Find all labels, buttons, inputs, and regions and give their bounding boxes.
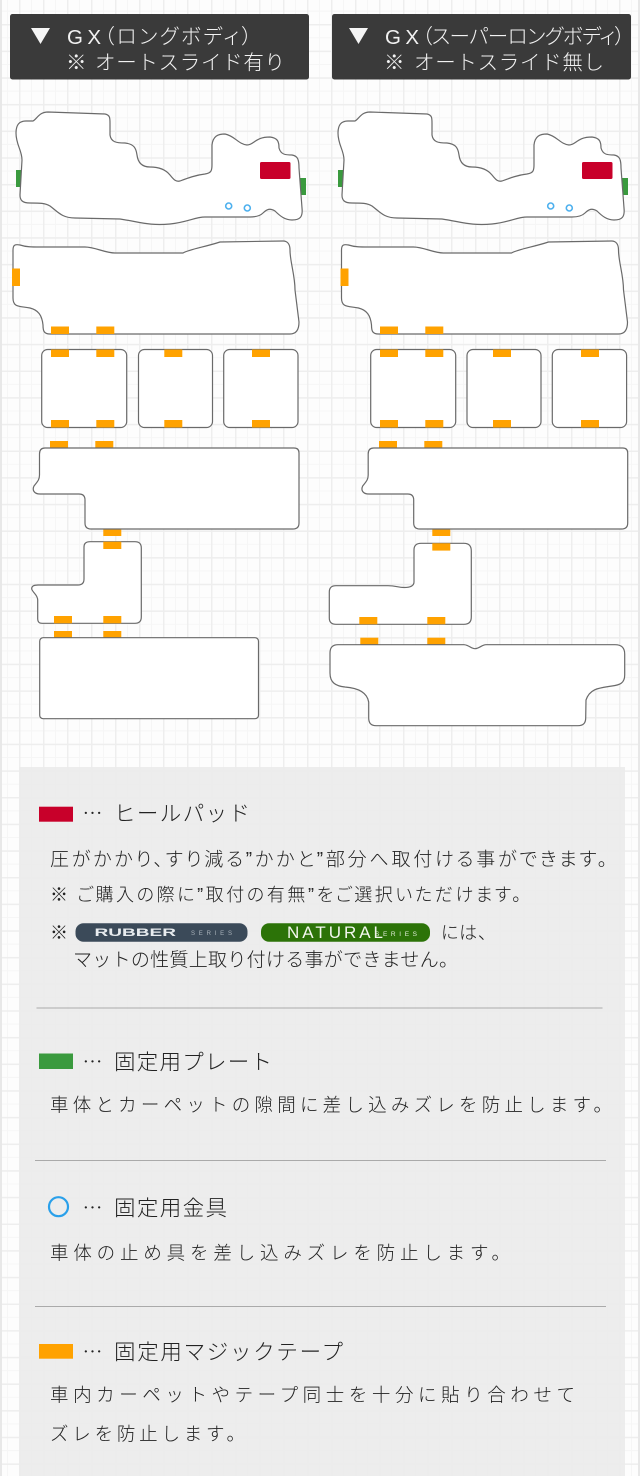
legend: heel pad: マットの性質上取り付ける事ができません。	[73, 949, 458, 971]
second row mat left	[12, 241, 299, 334]
rear mat right	[330, 638, 625, 726]
badge: rubber series: RUBBER	[94, 927, 176, 939]
header: GX long body: GX	[67, 26, 101, 49]
legend: velcro tape: ズレを防止します。	[50, 1424, 245, 1444]
legend: heel pad: …	[82, 798, 102, 826]
legend: metal fastener: 車体の止め具を差し込みズレを防止します。	[50, 1242, 510, 1264]
seat mats left	[42, 350, 298, 428]
legend: heel pad: ※	[50, 923, 68, 943]
header: GX super long body	[332, 14, 631, 80]
header: GX super long body: オートスライド無し	[414, 52, 604, 74]
panel: legend	[19, 767, 625, 1476]
badge: rubber series: SERIES	[191, 931, 232, 937]
L shaped mat left	[32, 542, 141, 623]
second row mat right	[340, 241, 628, 334]
header: GX long body	[10, 14, 309, 80]
header: GX long body: ※	[66, 52, 86, 74]
legend: heel pad: 圧がかかり、すり減る”かかと”部分へ取付ける事ができます。	[50, 848, 607, 870]
legend: heel pad: ※	[50, 885, 68, 905]
header: GX super long body: ※	[384, 52, 404, 74]
legend: fixing plate: 固定用プレート	[114, 1050, 272, 1074]
legend: fixing plate	[39, 1046, 612, 1116]
header: GX long body: （ロングボディ）	[104, 26, 252, 48]
badge: rubber series	[76, 923, 248, 942]
badge: natural series: NATURAL	[287, 923, 383, 942]
front mat left	[16, 112, 306, 225]
header: GX long body: オートスライド有り	[95, 52, 285, 74]
legend: heel pad: ご購入の際に”取付の有無”をご選択いただけます。	[77, 885, 521, 905]
mat diagram: super long body layout	[329, 112, 628, 726]
legend: heel pad	[39, 798, 607, 971]
legend: velcro tape	[39, 1336, 575, 1444]
seat mats right	[371, 350, 627, 428]
legend: heel pad: ヒールパッド	[114, 802, 250, 826]
legend: velcro tape: …	[82, 1336, 102, 1365]
third row mat left	[33, 441, 299, 536]
legend: velcro tape: 車内カーペットやテープ同士を十分に貼り合わせて	[50, 1384, 575, 1406]
L shaped mat right	[329, 543, 471, 624]
front mat right	[338, 112, 628, 225]
third row mat right	[362, 441, 628, 536]
legend: metal fastener: 固定用金具	[114, 1196, 227, 1220]
mat diagram: long body layout	[12, 112, 306, 719]
header: GX super long body: GX	[385, 26, 419, 49]
badge: natural series: SERIES	[375, 931, 418, 938]
legend: heel pad: には、	[441, 923, 487, 943]
legend: metal fastener	[49, 1192, 510, 1264]
header: GX super long body: （スーパーロングボディ）	[422, 26, 625, 48]
legend: fixing plate: 車体とカーペットの隙間に差し込みズレを防止します。	[50, 1094, 612, 1116]
badge: natural series	[261, 923, 430, 942]
legend: fixing plate: …	[82, 1046, 102, 1075]
legend: velcro tape: 固定用マジックテープ	[114, 1340, 343, 1364]
legend: metal fastener: …	[82, 1192, 102, 1221]
rear mat left	[40, 631, 259, 719]
